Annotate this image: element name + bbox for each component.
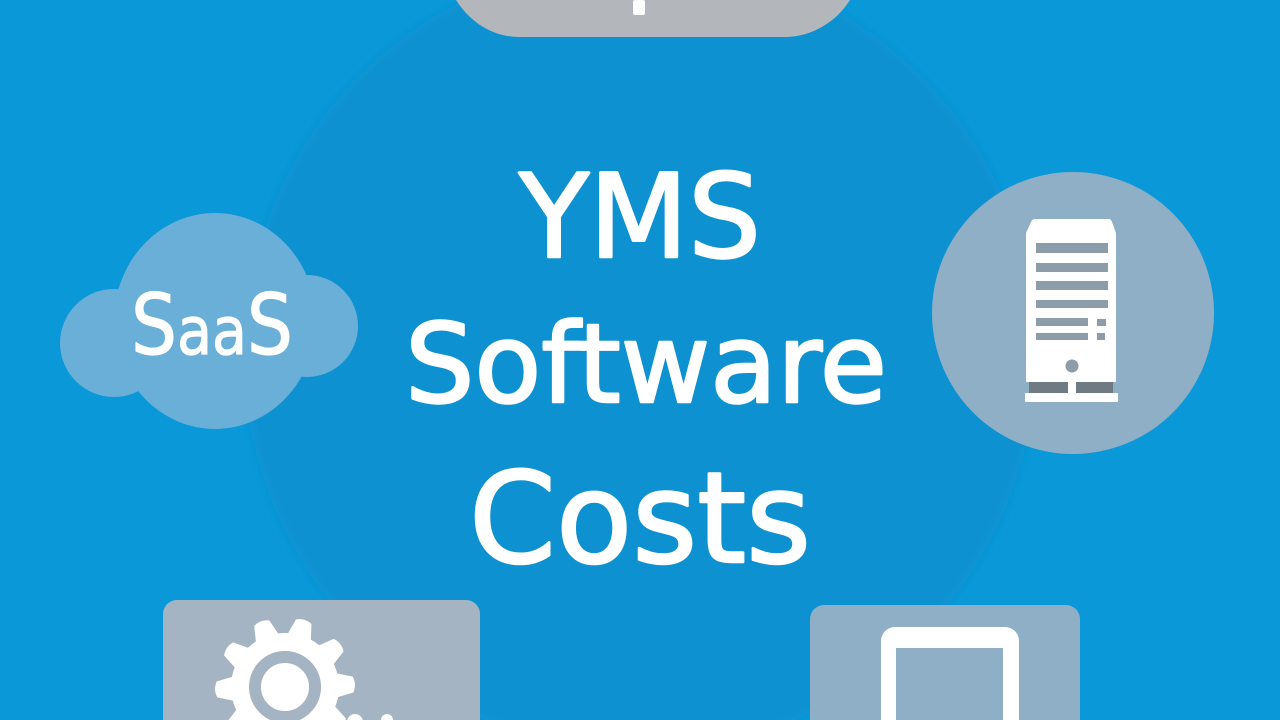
- icon: SaaS cloud: SaaS: [131, 276, 293, 374]
- title: [405, 150, 887, 592]
- title: YMS: [518, 150, 761, 285]
- icon: server tower: [932, 172, 1214, 454]
- icon: SaaS cloud: [60, 213, 358, 429]
- icon: tablet panel: [810, 605, 1080, 720]
- icon: gear: [215, 616, 355, 720]
- title: Software: [405, 300, 887, 428]
- icon: top panel: [456, 0, 850, 37]
- central circle: [244, 0, 1036, 720]
- title: Costs: [469, 445, 811, 592]
- icon: gear panel: [163, 600, 480, 720]
